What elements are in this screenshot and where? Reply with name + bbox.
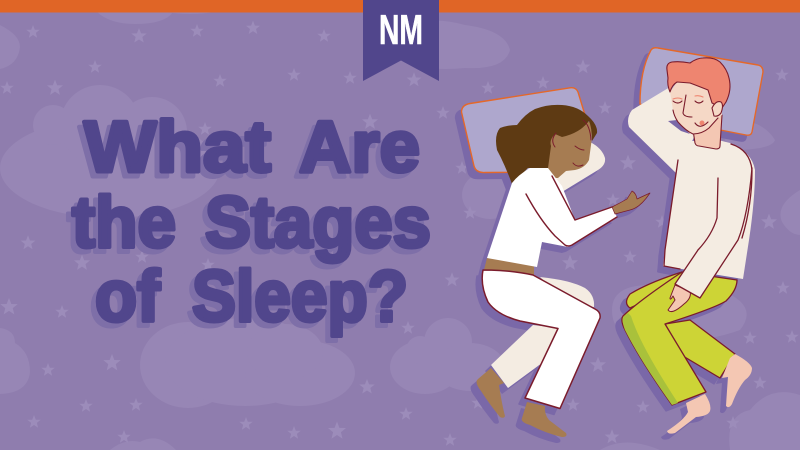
woman neck and face (540, 122, 592, 178)
title text: What (84, 108, 271, 188)
man eyes and nose (673, 95, 708, 126)
logo letters: NM (379, 6, 423, 53)
man pillow (640, 48, 763, 135)
man cheek (700, 120, 704, 126)
title text: of (95, 257, 161, 337)
logo banner (363, 0, 439, 81)
woman arm outline (526, 176, 617, 246)
man rear foot (722, 354, 752, 407)
title shadow: the (67, 188, 171, 268)
woman trousers (482, 270, 600, 408)
woman sleeping figure (462, 88, 650, 437)
woman ear (553, 133, 556, 147)
man hand (668, 285, 690, 312)
woman back arm (550, 142, 605, 192)
woman back leg (491, 325, 560, 388)
man eyelid accents (673, 96, 703, 99)
man rear leg (665, 320, 735, 378)
man ear (712, 102, 722, 116)
man hair (667, 58, 730, 108)
man forearm (675, 240, 738, 298)
woman shirt (487, 168, 617, 267)
woman hand (612, 191, 650, 214)
title text: Are (299, 108, 420, 188)
woman hair (496, 105, 597, 184)
man forearm outlines (675, 168, 752, 298)
man torso outlines (664, 144, 752, 269)
top orange bar (0, 0, 800, 12)
title text: the (72, 183, 176, 263)
man trouser shading (623, 313, 678, 405)
woman pillow (462, 88, 585, 173)
man head arm (628, 87, 695, 174)
title shadow (67, 112, 426, 342)
title shadow: of (90, 262, 156, 342)
title text: Sleep? (192, 257, 408, 337)
man jaw shadow (668, 120, 690, 134)
man trousers (622, 272, 737, 405)
woman foot front (522, 402, 566, 437)
title shadow: Are (294, 112, 415, 192)
woman foot rear (477, 368, 505, 418)
title (67, 108, 431, 342)
woman face lines (573, 120, 591, 166)
man face (670, 82, 722, 134)
title shadow: Sleep? (187, 262, 403, 342)
man sleeping figure (622, 48, 763, 434)
title shadow: What (79, 112, 266, 192)
title text: Stages (205, 183, 431, 263)
man front foot (667, 394, 710, 434)
woman upper knee (540, 277, 594, 307)
man neck (693, 115, 722, 149)
title shadow: Stages (200, 188, 426, 268)
man torso (663, 140, 755, 279)
title text (72, 108, 431, 337)
man hip bump (626, 272, 682, 308)
man jaw line (673, 110, 718, 134)
woman midriff (484, 258, 534, 276)
